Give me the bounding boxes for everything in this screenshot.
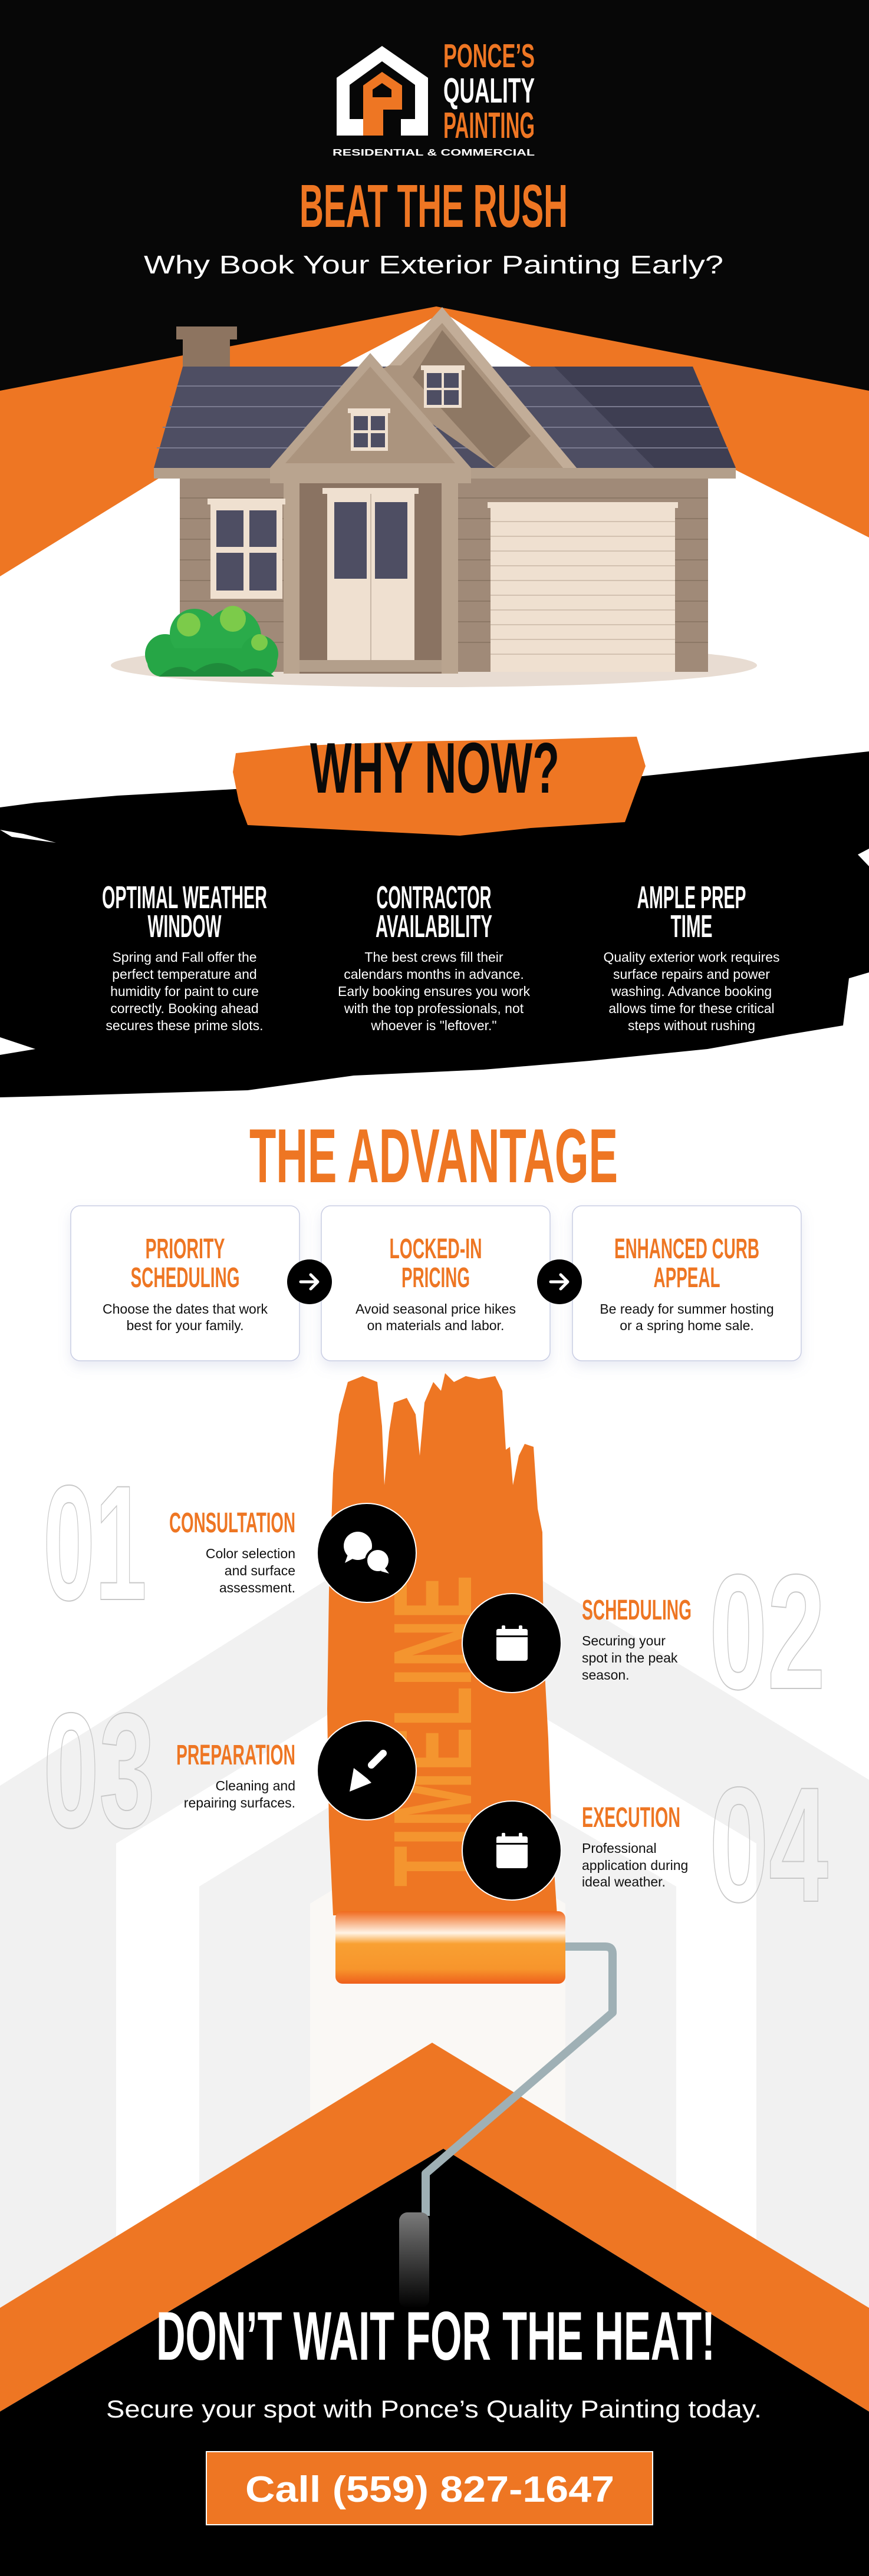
step numbers outlined: 01 xyxy=(43,1451,147,1634)
card: enhanced curb appeal: ENHANCED CURB xyxy=(614,1233,759,1265)
card: priority scheduling xyxy=(71,1206,299,1361)
column: optimal weather window: WINDOW xyxy=(147,909,222,944)
icon: chat bubbles xyxy=(317,1503,416,1602)
card: enhanced curb appeal: or a spring home sale. xyxy=(620,1318,754,1333)
step 4: execution: Professional xyxy=(582,1841,657,1856)
column: contractor availability: calendars months in advance. xyxy=(344,967,524,982)
card: enhanced curb appeal: Be ready for summer hosting xyxy=(600,1301,774,1317)
column: optimal weather window: humidity for paint to cure xyxy=(110,984,259,999)
column: optimal weather window: correctly. Booking ahead xyxy=(110,1001,259,1016)
step 4: execution: EXECUTION xyxy=(582,1802,680,1833)
column: optimal weather window xyxy=(102,880,267,1033)
column: ample prep time: Quality exterior work requires xyxy=(603,949,780,965)
step 1: consultation: and surface xyxy=(225,1563,295,1578)
arrow: card 2 to 3 xyxy=(537,1259,582,1304)
step 2: scheduling xyxy=(462,1594,692,1693)
footer roof xyxy=(0,2043,869,2576)
column: contractor availability xyxy=(338,880,530,1033)
column: contractor availability: whoever is "leftover." xyxy=(370,1018,497,1033)
step 1: consultation: assessment. xyxy=(219,1580,295,1595)
column: ample prep time: AMPLE PREP xyxy=(637,880,746,915)
column: optimal weather window: secures these prime slots. xyxy=(106,1018,264,1033)
card: enhanced curb appeal xyxy=(572,1206,801,1361)
step 3: preparation: repairing surfaces. xyxy=(184,1795,295,1810)
step numbers outlined xyxy=(43,1451,829,1936)
icon: calendar xyxy=(462,1801,561,1900)
card: priority scheduling: SCHEDULING xyxy=(131,1262,239,1294)
column: optimal weather window: Spring and Fall offer the xyxy=(112,949,257,965)
column: contractor availability: AVAILABILITY xyxy=(376,909,492,944)
card: priority scheduling: best for your family. xyxy=(127,1318,243,1333)
icon: trowel xyxy=(317,1721,416,1820)
panel: why now background brush xyxy=(0,751,869,1097)
cta button xyxy=(206,2452,653,2525)
step 1: consultation: Color selection xyxy=(206,1546,295,1561)
title: BEAT THE RUSH xyxy=(299,172,568,240)
logo xyxy=(333,37,535,158)
column: contractor availability: CONTRACTOR xyxy=(376,880,492,915)
timeline brush xyxy=(327,1373,557,1915)
column: optimal weather window: OPTIMAL WEATHER xyxy=(102,880,267,915)
house illustration xyxy=(111,307,757,687)
step 1: consultation: CONSULTATION xyxy=(169,1508,295,1539)
step 2: scheduling: spot in the peak xyxy=(582,1650,678,1665)
column: ample prep time: washing. Advance booking xyxy=(611,984,772,999)
step 3: preparation: Cleaning and xyxy=(215,1778,295,1793)
column: ample prep time: surface repairs and power xyxy=(613,967,770,982)
heading: why now: WHY NOW? xyxy=(310,728,559,808)
card: locked-in pricing: LOCKED-IN xyxy=(389,1233,482,1265)
column: ample prep time: steps without rushing xyxy=(628,1018,755,1033)
timeline vertical text: TIMELINE xyxy=(371,1575,495,1887)
header background xyxy=(0,0,869,766)
step 1: consultation xyxy=(169,1503,416,1602)
icon: calendar xyxy=(462,1594,561,1693)
icon: bush xyxy=(145,606,278,677)
card: locked-in pricing: PRICING xyxy=(401,1262,470,1294)
card: locked-in pricing: on materials and labor. xyxy=(367,1318,504,1333)
timeline background house xyxy=(0,1513,869,2310)
step 4: execution: application during xyxy=(582,1858,688,1873)
column: optimal weather window: perfect temperature and xyxy=(112,967,257,982)
arrow: card 1 to 2 xyxy=(287,1259,332,1304)
column: contractor availability: The best crews fill their xyxy=(364,949,503,965)
step 2: scheduling: Securing your xyxy=(582,1633,666,1648)
column: ample prep time: TIME xyxy=(671,909,712,944)
step 4: execution xyxy=(462,1801,688,1900)
card: locked-in pricing: Avoid seasonal price hikes xyxy=(356,1301,516,1317)
logo: RESIDENTIAL & COMMERCIAL xyxy=(333,148,535,158)
card: priority scheduling: PRIORITY xyxy=(145,1233,225,1265)
paint roller xyxy=(335,1911,613,2308)
step 2: scheduling: season. xyxy=(582,1667,630,1683)
subtitle: Why Book Your Exterior Painting Early? xyxy=(144,250,723,279)
step 2: scheduling: SCHEDULING xyxy=(582,1595,692,1626)
card: locked-in pricing xyxy=(321,1206,550,1361)
orange brush stroke xyxy=(233,737,646,836)
cta subtext: Secure your spot with Ponce’s Quality Painting today. xyxy=(106,2395,762,2423)
step 3: preparation: PREPARATION xyxy=(176,1740,295,1771)
column: contractor availability: with the top professionals, not xyxy=(344,1001,524,1016)
icon: logo house xyxy=(337,46,428,136)
logo: PAINTING xyxy=(443,105,535,146)
step numbers outlined: 03 xyxy=(43,1678,155,1862)
card: enhanced curb appeal: APPEAL xyxy=(653,1262,720,1294)
step 3: preparation xyxy=(176,1721,416,1820)
logo: QUALITY xyxy=(443,71,535,110)
column: ample prep time xyxy=(603,880,780,1033)
step 4: execution: ideal weather. xyxy=(582,1874,666,1889)
logo: PONCE’S xyxy=(443,37,535,75)
column: ample prep time: allows time for these critical xyxy=(608,1001,775,1016)
column: contractor availability: Early booking ensures you work xyxy=(338,984,530,999)
cta button: Call (559) 827-1647 xyxy=(245,2469,614,2510)
card: priority scheduling: Choose the dates that work xyxy=(103,1301,268,1317)
